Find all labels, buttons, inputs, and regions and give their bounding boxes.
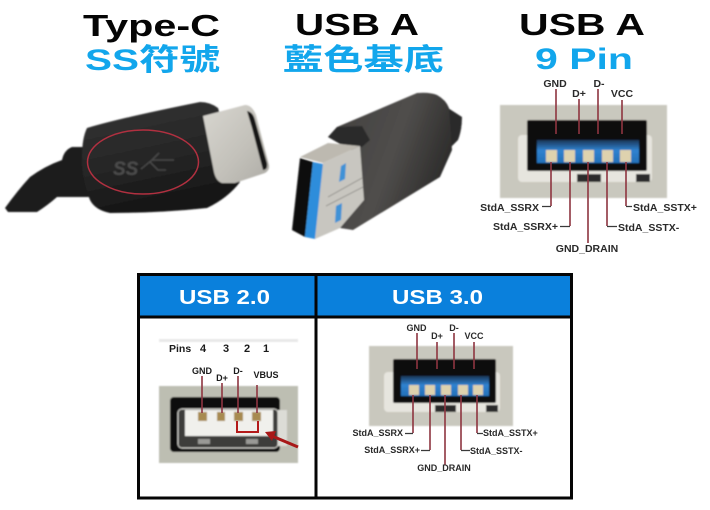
table: USB 2.0 vs USB 3.0 [138, 274, 572, 498]
pin labels: StdA_SSTX+ [483, 428, 538, 438]
pin labels: D+ [216, 373, 228, 383]
heading: Type-C SS symbol: Type-C [83, 8, 220, 43]
pin labels: D- [449, 323, 459, 333]
heading: USB A blue base: USB A [295, 7, 419, 42]
pin labels: D+ [431, 331, 443, 341]
pin labels: VBUS [253, 370, 279, 380]
table header: USB 2.0 [139, 275, 316, 316]
pin labels: GND [543, 78, 567, 90]
diagram: USB 3.0 pinout [352, 323, 538, 473]
pin labels: VCC [611, 88, 634, 100]
pin labels: StdA_SSTX- [618, 222, 680, 234]
photo: Type-C connector with SS mark: SS [113, 159, 139, 180]
pin labels: D- [593, 78, 605, 90]
pin labels: StdA_SSRX [352, 428, 403, 438]
pin number row: 2 [244, 343, 250, 355]
highlight bracket and arrow [237, 421, 298, 447]
table header: USB 3.0: USB 3.0 [392, 287, 483, 309]
connector photo [369, 346, 513, 426]
heading: USB A blue base: 藍色基底 [283, 44, 444, 77]
table header: USB 2.0: USB 2.0 [179, 287, 270, 309]
heading: USB A blue base [283, 7, 444, 77]
pin labels: D+ [572, 88, 586, 100]
pin leader lines [542, 89, 632, 243]
pin labels: StdA_SSRX+ [493, 221, 558, 233]
pin number row: 1 [263, 343, 269, 355]
pin number row: Pins [169, 343, 191, 355]
pin number row: 4 [200, 343, 207, 355]
pin number row [169, 343, 269, 355]
diagram: USB A 9-pin pinout [480, 78, 697, 255]
pin labels: GND_DRAIN [417, 463, 471, 473]
table header: USB 3.0 [316, 275, 571, 316]
diagram: USB 2.0 pinout [159, 339, 298, 463]
pin labels: StdA_SSTX- [470, 446, 523, 456]
pin labels: D- [233, 366, 243, 376]
photo: Type-C connector with SS mark [5, 102, 269, 213]
heading: USB A 9 Pin: 9 Pin [535, 43, 633, 76]
pin labels: GND [192, 366, 212, 376]
pin labels: StdA_SSRX [480, 202, 539, 214]
heading: USB A 9 Pin [519, 7, 645, 76]
pin labels: GND [406, 323, 427, 333]
heading: Type-C SS symbol [83, 8, 220, 77]
pin labels: StdA_SSRX+ [364, 445, 420, 455]
pin number row: 3 [223, 343, 229, 355]
pin leader lines [405, 333, 483, 465]
pin labels: GND_DRAIN [556, 243, 618, 255]
heading: Type-C SS symbol: SS符號 [85, 44, 220, 77]
pin labels [480, 78, 697, 255]
pin labels: VCC [464, 331, 484, 341]
pin leader lines [202, 376, 257, 413]
heading: USB A 9 Pin: USB A [519, 7, 645, 42]
connector photo [500, 105, 667, 198]
photo: USB A plug with blue base [292, 93, 462, 239]
connector photo [159, 339, 298, 463]
pin labels: StdA_SSTX+ [633, 202, 697, 214]
pin labels [352, 323, 538, 473]
pin labels [192, 366, 279, 383]
table frame [138, 274, 572, 498]
